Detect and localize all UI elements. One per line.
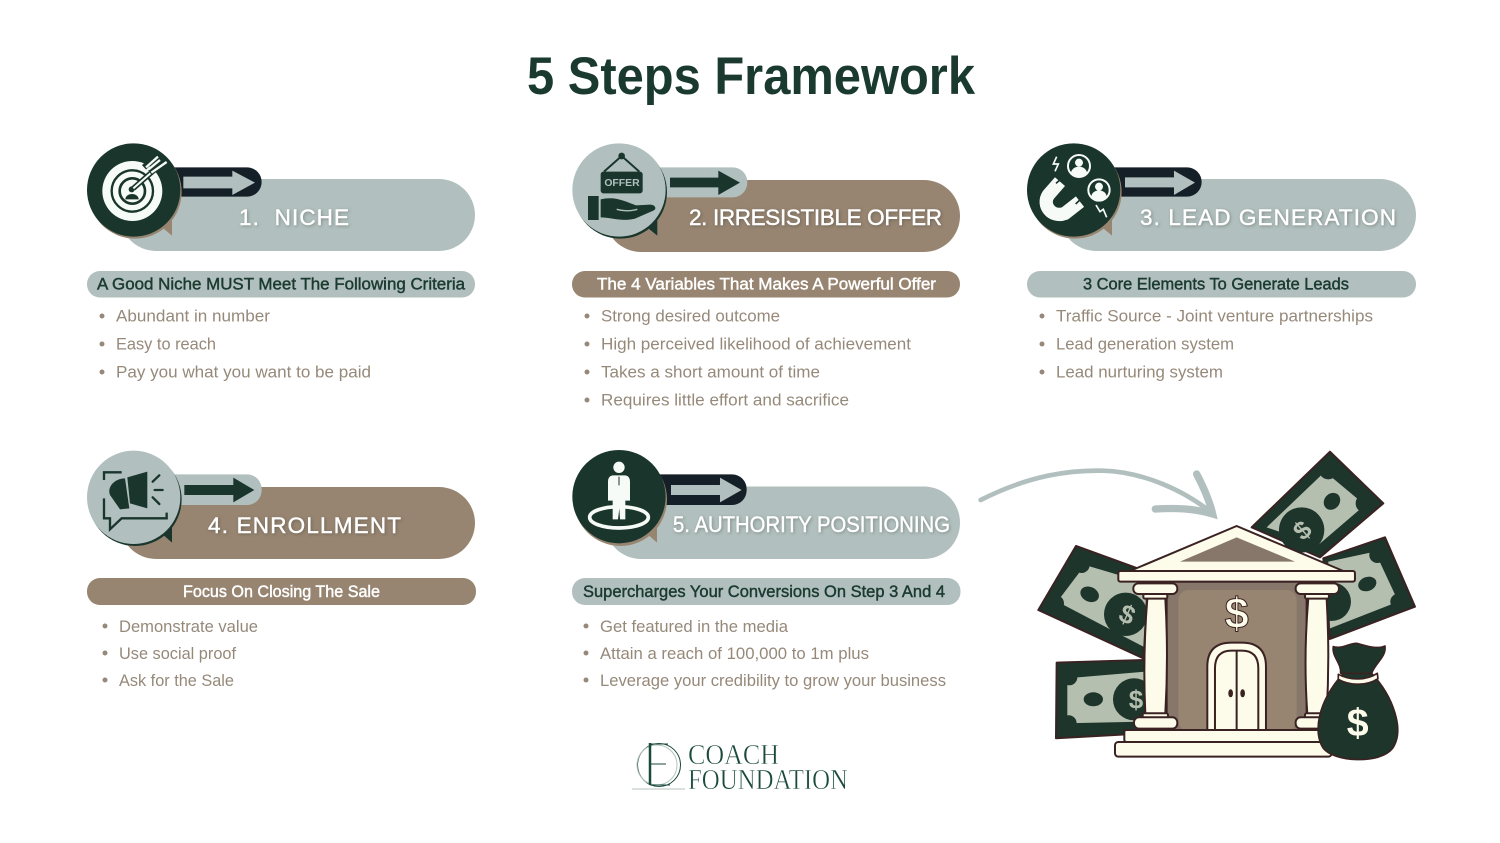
icon: money bag: $: [1347, 701, 1369, 745]
logo: Coach Foundation: FOUNDATION: [688, 765, 848, 796]
bullet list: Easy to reach: [116, 334, 216, 354]
bullet list: Strong desired outcome: [601, 306, 780, 326]
panel: step 5 authority positioning: [572, 450, 960, 690]
arrow tab and icon: target: [87, 143, 262, 239]
subheading text: 3 Core Elements To Generate Leads: [1083, 274, 1349, 294]
logo: Coach Foundation: [632, 740, 848, 796]
step heading: 5. AUTHORITY POSITIONING: [673, 512, 950, 537]
subheading text: A Good Niche MUST Meet The Following Criteria: [97, 274, 466, 294]
step heading: 4. ENROLLMENT: [208, 513, 401, 538]
header pill: [120, 179, 475, 251]
banknote dollar signs: $: [1115, 598, 1141, 631]
bank dollar sign: $: [1225, 590, 1249, 638]
panel: step 2 irresistible offer: [572, 143, 960, 410]
icon: money bag: [1318, 643, 1398, 760]
bullet list: [584, 617, 946, 690]
bullet list: Ask for the Sale: [119, 671, 234, 690]
subheading pill: [87, 578, 476, 605]
subheading pill: [572, 578, 960, 605]
title: 5 Steps Framework: [527, 47, 975, 106]
banknote dollar signs: $: [1287, 514, 1318, 546]
step heading: 2. IRRESISTIBLE OFFER: [689, 205, 942, 230]
arrow: curved arrow to bank: [981, 471, 1213, 514]
subheading text: Focus On Closing The Sale: [183, 582, 380, 601]
bullet list: Abundant in number: [116, 306, 270, 326]
header pill: [120, 487, 475, 559]
subheading pill: [572, 271, 960, 298]
header pill: [1060, 179, 1416, 251]
logo mark: [632, 743, 685, 789]
header pill: [605, 486, 960, 559]
bullet list: Attain a reach of 100,000 to 1m plus: [600, 644, 869, 663]
bullet list: Requires little effort and sacrifice: [601, 390, 849, 410]
bullet list: High perceived likelihood of achievement: [601, 334, 911, 354]
bullet list: [1040, 306, 1373, 382]
subheading pill: [87, 271, 475, 298]
bullet list: [584, 306, 911, 410]
illustration: bank with money: [1038, 452, 1415, 760]
banknote dollar signs: [1115, 514, 1318, 715]
arrow tab and icon: standing person: [572, 450, 747, 546]
icon: banknotes: [1038, 452, 1415, 738]
bullet list: Takes a short amount of time: [601, 362, 820, 382]
subheading pill: [1027, 271, 1416, 298]
arrow tab and icon: offer sign: [572, 143, 747, 239]
step heading: 3. LEAD GENERATION: [1140, 205, 1396, 230]
bullet list: [100, 306, 371, 382]
panel: step 3 lead generation: [1027, 143, 1416, 382]
banknote dollar signs: $: [1129, 685, 1144, 715]
logo wordmark: COACH: [688, 740, 779, 771]
bullet list: Lead generation system: [1056, 334, 1234, 354]
subheading text: The 4 Variables That Makes A Powerful Offer: [597, 274, 936, 294]
arrow tab and icon: magnet: [1027, 143, 1202, 239]
bullet list: Demonstrate value: [119, 617, 258, 636]
bullet list: Traffic Source - Joint venture partnerships: [1056, 306, 1373, 326]
arrow tab and icon: offer sign: OFFER: [604, 178, 640, 189]
panel: step 1 niche: [87, 143, 475, 382]
panel: step 4 enrollment: [87, 451, 476, 690]
bullet list: [102, 617, 258, 690]
subheading text: Supercharges Your Conversions On Step 3 And 4: [583, 582, 945, 601]
icon: bank building: [1115, 526, 1355, 757]
bullet list: Leverage your credibility to grow your business: [600, 671, 946, 690]
bullet list: Use social proof: [119, 644, 236, 663]
bullet list: Lead nurturing system: [1056, 362, 1223, 382]
arrow tab and icon: megaphone: [87, 451, 262, 546]
header pill: [605, 180, 960, 252]
bullet list: Pay you what you want to be paid: [116, 362, 371, 382]
step heading: 1. NICHE: [239, 205, 349, 230]
bullet list: Get featured in the media: [600, 617, 789, 636]
